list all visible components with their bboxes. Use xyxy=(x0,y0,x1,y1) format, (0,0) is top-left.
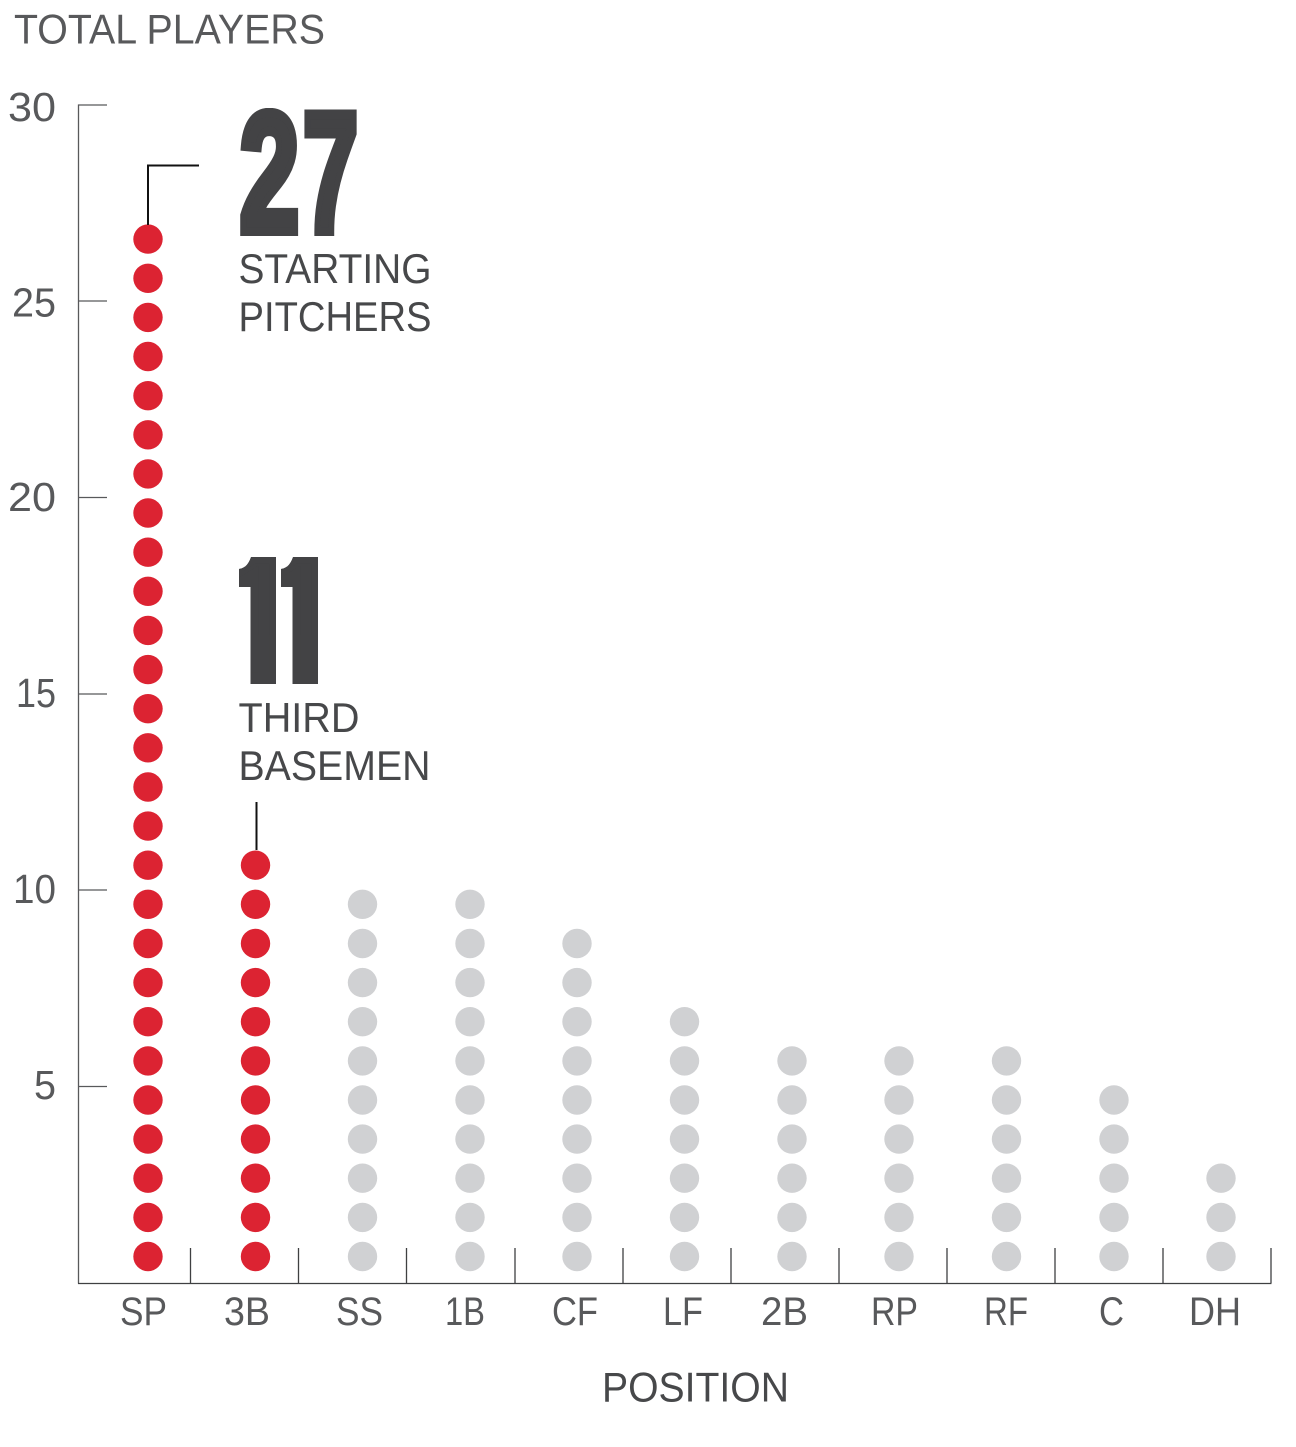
x axis position labels: C xyxy=(1099,1290,1124,1334)
x axis position labels: 3B xyxy=(224,1290,270,1334)
x axis position labels: 1B xyxy=(445,1290,485,1334)
dots: 2B, 6 players xyxy=(777,1046,807,1271)
y axis title: TOTAL PLAYERS xyxy=(14,6,325,52)
callout label xyxy=(238,245,432,340)
x axis with ticks xyxy=(78,1248,1272,1284)
x axis position labels: SS xyxy=(336,1290,383,1334)
big number 11 xyxy=(239,557,318,684)
dots: SS, 10 players xyxy=(348,890,377,1271)
callout label: STARTING xyxy=(238,245,432,292)
y axis labels: 25 xyxy=(12,280,56,326)
y axis labels: 10 xyxy=(13,866,56,912)
x axis position labels: CF xyxy=(552,1290,598,1334)
callout label: PITCHERS xyxy=(238,293,432,340)
leader line: third basemen callout xyxy=(256,802,258,850)
y axis labels xyxy=(8,84,56,1108)
dots: LF, 7 players xyxy=(670,1007,699,1271)
dots: C, 5 players xyxy=(1099,1085,1129,1271)
dots: RP, 6 players xyxy=(884,1046,914,1271)
x axis title: POSITION xyxy=(602,1364,789,1410)
x axis position labels: SP xyxy=(120,1290,167,1334)
callout: 27 starting pitchers xyxy=(240,108,430,332)
y axis labels: 20 xyxy=(8,474,56,520)
dots: SP, 27 starting pitchers xyxy=(133,224,163,1271)
x axis position labels: DH xyxy=(1189,1290,1241,1334)
big number 27: 2 xyxy=(240,79,299,269)
callout label xyxy=(238,694,430,789)
x axis position labels: RF xyxy=(984,1290,1028,1334)
callout label: THIRD xyxy=(238,694,360,741)
callout: 11 third basemen xyxy=(239,557,428,780)
dots: 1B, 10 players xyxy=(455,890,485,1271)
x axis position labels xyxy=(120,1290,1241,1334)
y axis with ticks xyxy=(78,104,107,1284)
dots: CF, 9 players xyxy=(562,929,592,1271)
y axis labels: 5 xyxy=(34,1062,56,1108)
big number 11: 1 xyxy=(208,518,311,724)
x axis position labels: RP xyxy=(871,1290,918,1334)
x axis position labels: 2B xyxy=(761,1290,808,1334)
dots: 3B, 11 third basemen xyxy=(241,850,270,1271)
y axis labels: 15 xyxy=(16,670,56,716)
x axis position labels: LF xyxy=(663,1290,703,1334)
dots: RF, 6 players xyxy=(992,1046,1021,1271)
y axis labels: 30 xyxy=(8,84,56,130)
leader line: starting pitchers callout xyxy=(148,166,199,225)
big number 11: 1 xyxy=(250,518,353,724)
callout label: BASEMEN xyxy=(238,742,430,789)
big number 27: 7 xyxy=(303,77,358,269)
big number 27 xyxy=(240,108,357,236)
dots: DH, 3 players xyxy=(1206,1164,1236,1271)
